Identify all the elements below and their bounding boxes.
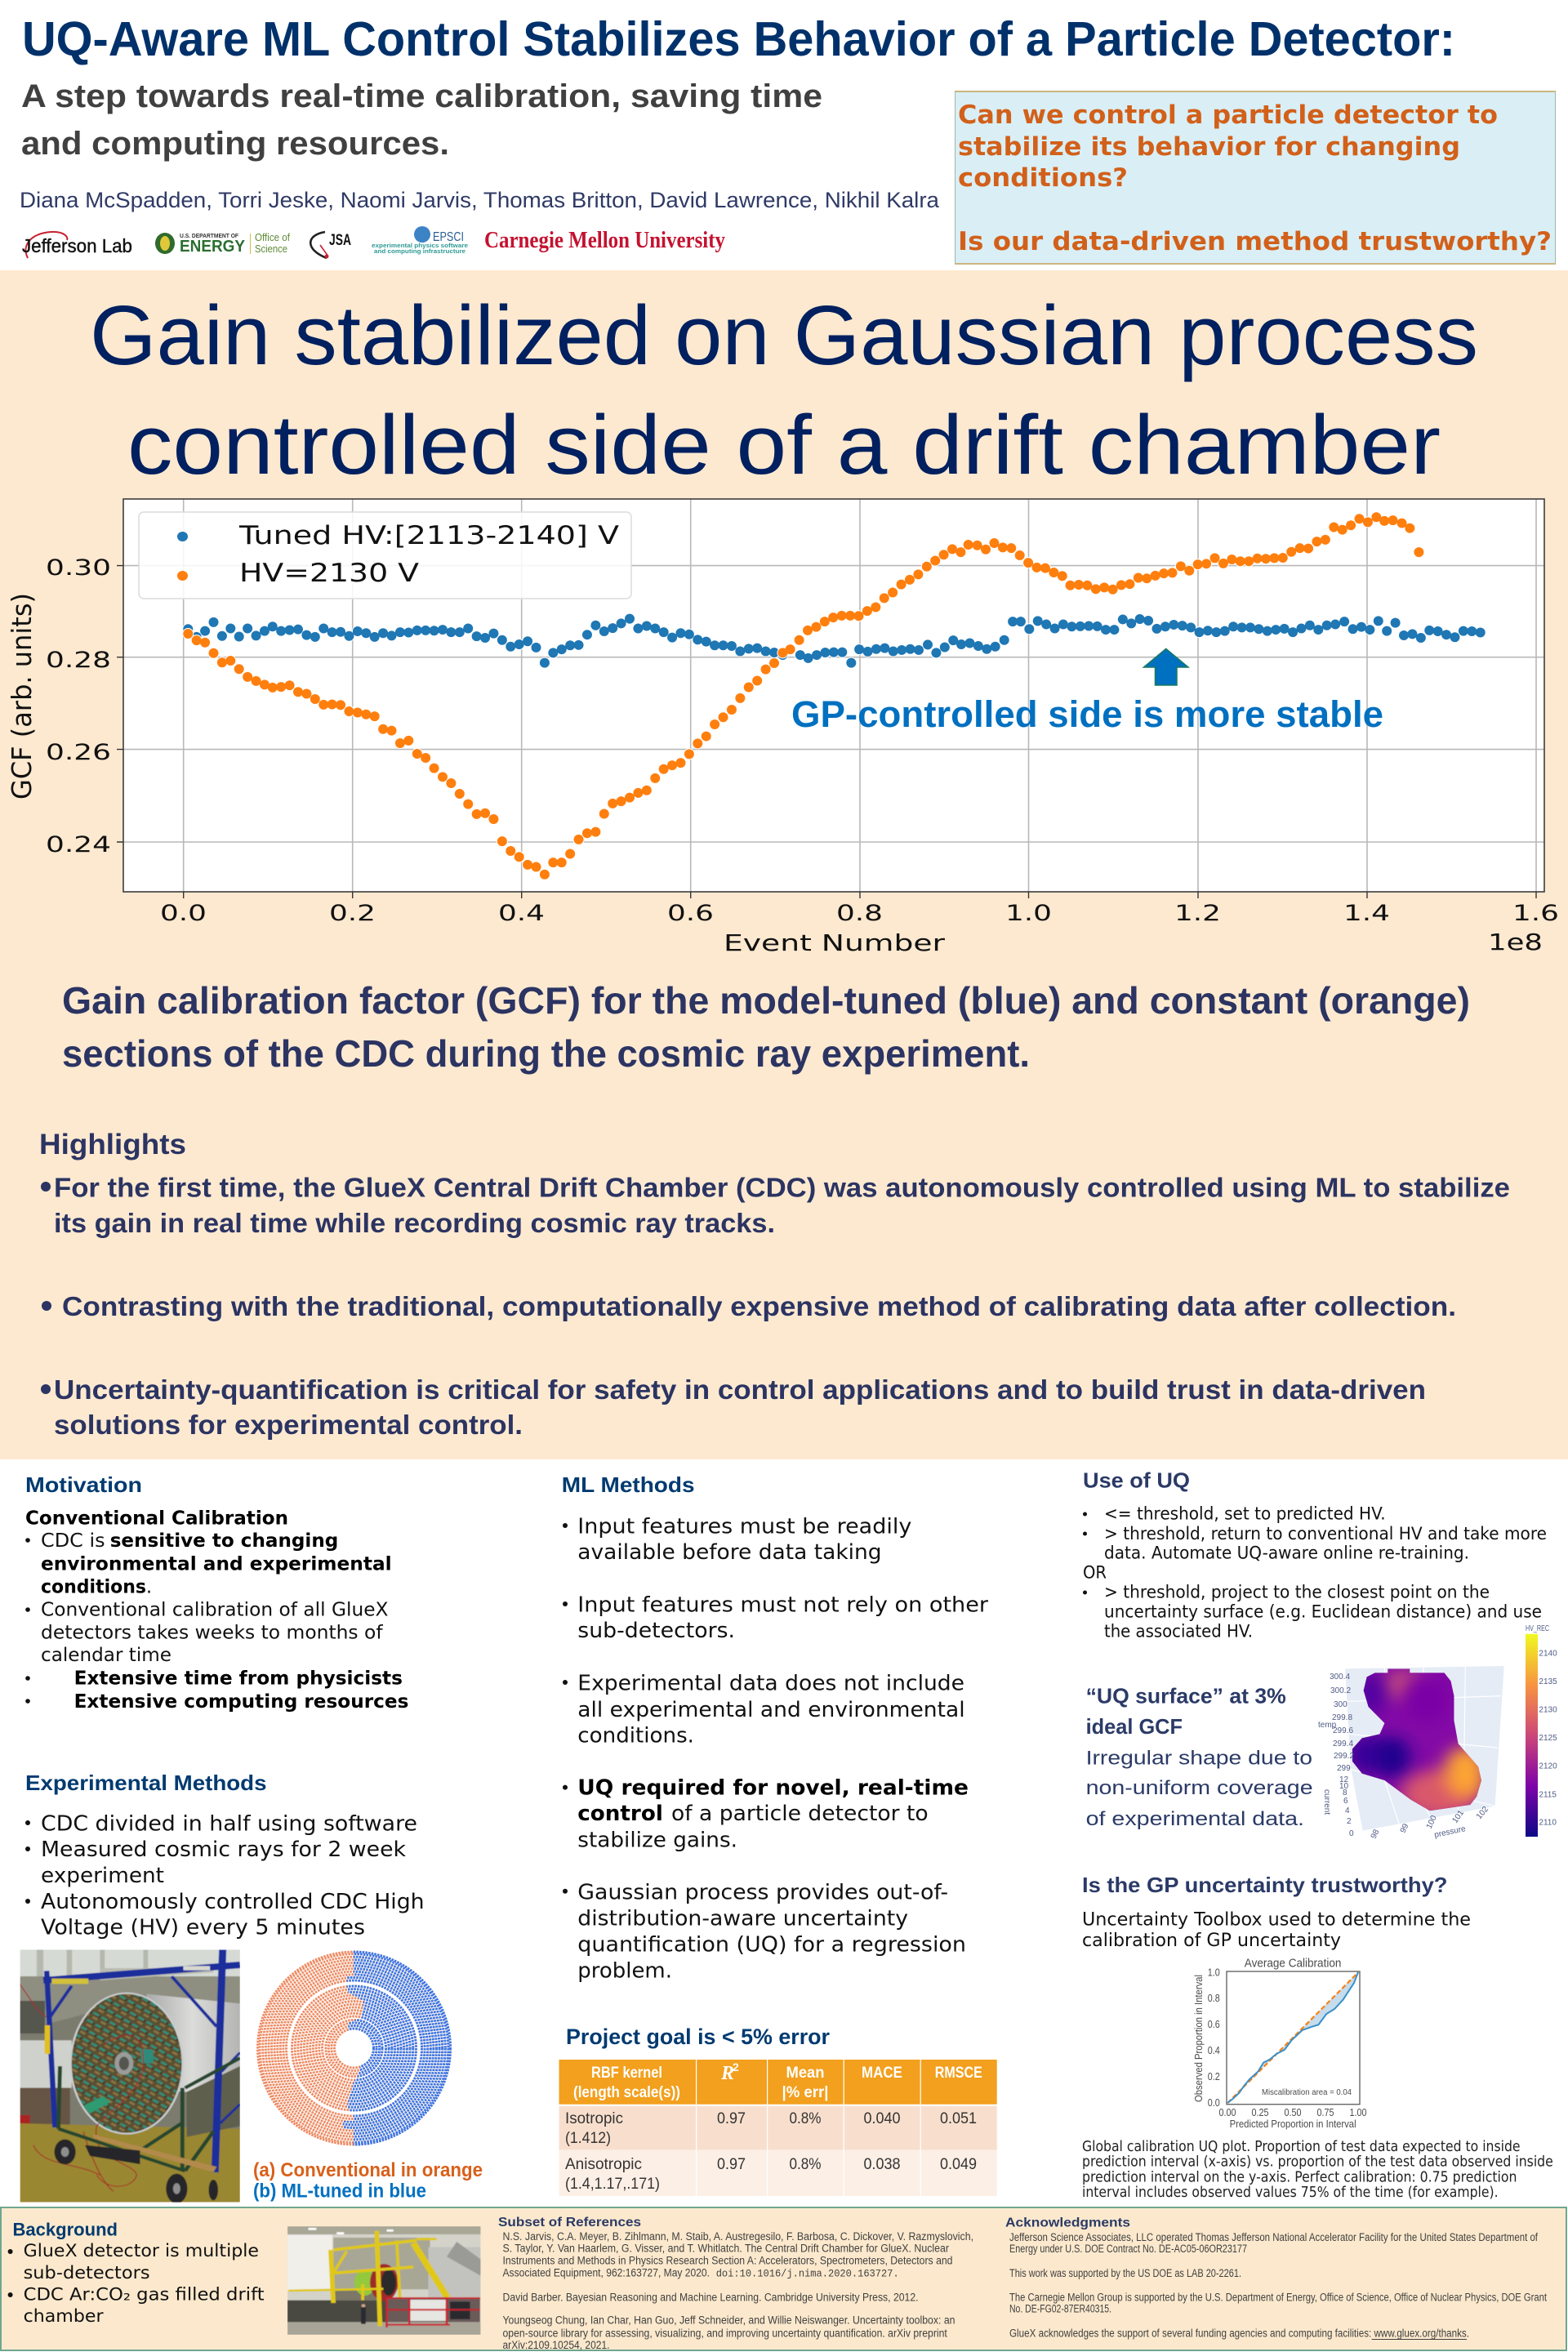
text block: background: CDC Ar:CO₂ gas filled drift [24,2285,265,2305]
text block: background: GlueX detector is multiple [24,2241,259,2261]
x axis tick labels [160,901,1559,926]
panel: ML methods: control [577,1802,663,1826]
table: kernel results: 0.97 [717,2156,746,2173]
legend: Tuned HV:[2113-2140] V [238,521,619,550]
logo: U.S. Department of Energy Office of Science: Office of [255,231,290,243]
highlights: Contrasting with the traditional, computationally expensive method of calibrating data after collection. [62,1292,1456,1322]
table: kernel results: 0.8% [789,2110,822,2127]
panel: use of UQ: <= threshold, set to predicted HV. [1104,1504,1386,1524]
x axis tick labels: 1.4 [1343,901,1390,926]
panel: use of UQ: the associated HV. [1104,1622,1253,1642]
subtitle: and computing resources. [21,126,449,162]
axis labels: 101 [1450,1808,1466,1825]
main headline: Gain stabilized on Gaussian process [90,288,1478,382]
x axis tick labels: 1.6 [1512,901,1559,926]
y axis tick labels: 0.26 [46,740,111,765]
diagram legend: (b) ML-tuned in blue [253,2180,426,2203]
axis labels: pressure [1433,1824,1467,1840]
arrow: pointing to GP-controlled series [1143,648,1188,685]
axis labels: 99 [1399,1822,1411,1834]
highlights: its gain in real time while recording cosmic ray tracks. [54,1209,775,1239]
panel: experimental methods [25,1771,425,1940]
highlights [39,1129,1510,1441]
logo: U.S. Department of Energy Office of Science: ENERGY [180,238,246,256]
panel: experimental methods: Experimental Methods [25,1771,266,1795]
chart: average calibration: 0.50 [1284,2106,1302,2118]
text block: references: N.S. Jarvis, C.A. Meyer, B. Zihlmann, M. Staib, A. Austregesilo, F. Barbosa, C. Dickover, V. Razmyslovich, [503,2230,973,2243]
colorbar: 2120 [1539,1762,1557,1771]
axis labels: 102 [1475,1805,1490,1821]
panel: ML methods: stabilize gains. [577,1828,737,1852]
text block: background: sub-detectors [24,2263,150,2283]
panel: experimental methods: Autonomously controlled CDC High [41,1890,425,1914]
main headline: controlled side of a drift chamber [127,398,1441,492]
x axis tick labels: 0.2 [329,901,376,926]
chart: 3D UQ surface with colorbar [1318,1624,1557,1840]
panel: experimental methods: CDC divided in half using software [41,1812,417,1837]
panel: ML methods [562,1472,988,1983]
text block: acknowledgments: Acknowledgments [1005,2216,1130,2230]
logo: Carnegie Mellon University: Carnegie Mellon University [484,228,725,253]
colorbar [1526,1624,1557,1837]
panel: GP uncertainty trust: Is the GP uncertainty trustworthy? [1082,1873,1447,1897]
panel: use of UQ: OR [1083,1563,1107,1583]
chart: average calibration [1192,1956,1367,2130]
scatter chart: GCF vs event number [6,499,1559,956]
panel: ML methods: ML Methods [562,1472,695,1497]
title: UQ-Aware ML Control Stabilizes Behavior of a Particle Detector: [22,12,1455,66]
logos row [22,226,725,258]
y axis tick labels: 0.24 [46,832,111,858]
panel: ML methods: conditions. [577,1723,694,1748]
panel: GP uncertainty trust: Uncertainty Toolbox used to determine the [1082,1909,1471,1930]
photo: GlueX detector hall [287,2226,481,2335]
logo: U.S. Department of Energy Office of Science [155,231,290,256]
subtitle: A step towards real-time calibration, saving time [21,78,822,114]
y axis tick labels: 0.30 [46,555,111,581]
table: kernel results: 0.049 [940,2156,977,2173]
panel: ML methods: Gaussian process provides out-of- [577,1880,948,1904]
table: kernel results: 2 [733,2060,739,2074]
colorbar: 2130 [1539,1705,1557,1715]
axis labels: 12 [1339,1775,1349,1784]
chart caption: sections of the CDC during the cosmic ray experiment. [62,1032,1030,1075]
panel: use of UQ: data. Automate UQ-aware online re-training. [1104,1544,1469,1563]
axis labels: 299.8 [1332,1713,1352,1722]
text block: background: chamber [24,2306,104,2326]
axis labels: 299 [1337,1764,1351,1773]
text block: background [8,2220,265,2326]
logo: EPSCI: experimental physics software [372,243,468,249]
table: kernel results: RBF kernel [591,2065,662,2082]
heading: project goal: Project goal is < 5% error [566,2025,830,2049]
panel: footer [1,2207,1566,2350]
chart: average calibration: 1.00 [1349,2106,1367,2118]
table: kernel results: 0.97 [717,2110,746,2127]
highlights: solutions for experimental control. [54,1410,523,1441]
panel: motivation: Motivation [25,1472,142,1497]
chart: average calibration: 0.6 [1208,2018,1220,2030]
text block: UQ surface: “UQ surface” at 3% [1086,1684,1286,1708]
diagram legend [253,2159,483,2203]
panel: ML methods: UQ required for novel, real-time [577,1775,969,1800]
panel: main result [0,270,1568,1459]
logo: Jefferson Lab: Jefferson Lab [22,235,132,256]
text block: UQ surface: of experimental data. [1086,1808,1304,1830]
text block: references: Associated Equipment, 962:163727, May 2020. [503,2266,710,2278]
axis labels: 98 [1370,1828,1382,1840]
table: kernel results: (length scale(s)) [573,2084,680,2101]
table: kernel results: (1.4,1.17,.171) [565,2176,660,2193]
logo: EPSCI: EPSCI [433,230,464,244]
logo: EPSCI [372,226,468,255]
panel: use of UQ [1083,1468,1547,1642]
x axis tick labels: 0.6 [667,901,714,926]
text block: references: doi:10.1016/j.nima.2020.163727. [716,2268,899,2279]
panel: experimental methods: Voltage (HV) every 5 minutes [41,1916,365,1940]
axis titles: GCF (arb. units) [6,593,38,800]
panel: experimental methods: Measured cosmic rays for 2 week [41,1838,406,1862]
panel: ML methods: Input features must be readily [577,1514,911,1539]
panel: ML methods: Input features must not rely on other [577,1592,988,1617]
panel: GP uncertainty trust: calibration of GP uncertainty [1082,1931,1341,1951]
axis labels: 299.2 [1334,1752,1354,1761]
photo: central drift chamber on cart [20,1949,240,2203]
axis titles: 1e8 [1488,929,1543,956]
axis labels: 299.4 [1333,1740,1353,1748]
axis titles [6,593,1543,956]
table: kernel results: RMSCE [935,2065,982,2082]
panel: ML methods: Experimental data does not include [577,1671,964,1695]
authors: Diana McSpadden, Torri Jeske, Naomi Jarvis, Thomas Britton, David Lawrence, Nikhil Kalra [20,188,939,212]
x axis tick labels: 1.0 [1005,901,1052,926]
colorbar: 2115 [1539,1790,1557,1800]
panel: ML methods: sub-detectors. [577,1619,735,1643]
logo: JSA: JSA [329,232,351,249]
axis labels: 300.2 [1330,1686,1351,1695]
table: kernel results: Isotropic [565,2110,623,2127]
chart: average calibration: Miscalibration area = 0.04 [1262,2088,1352,2097]
panel: ML methods: available before data taking [577,1540,882,1565]
caption: calibration plot: interval includes observed values 75% of the time (for example). [1082,2184,1499,2201]
chart caption: Gain calibration factor (GCF) for the model-tuned (blue) and constant (orange) [62,979,1470,1022]
chart: average calibration: Observed Proportion in Interval [1192,1975,1205,2102]
logo: JSA [310,232,351,258]
logo: EPSCI: and computing infrastructure [374,249,466,255]
logo: U.S. Department of Energy Office of Science: U.S. DEPARTMENT OF [180,234,239,239]
text block: references: open-source library for assessing, visualizing, and improving uncertainty quantification. arXiv preprint [503,2328,947,2340]
colorbar: 2110 [1539,1818,1557,1828]
diagram: CDC straw layout split orange and blue [258,1952,451,2145]
table: kernel results: 0.051 [940,2110,977,2127]
highlights: Highlights [39,1129,186,1160]
text block: acknowledgments [1005,2216,1547,2340]
colorbar: 2135 [1539,1677,1557,1686]
x axis tick labels: 0.8 [836,901,883,926]
axis labels: 300 [1334,1700,1348,1709]
caption: calibration plot [1082,2138,1553,2201]
table: kernel results: MACE [862,2065,902,2082]
table: kernel results: 0.040 [864,2110,900,2127]
axis labels: 100 [1425,1814,1439,1830]
highlights: Uncertainty-quantification is critical for safety in control applications and to build trust in data-driven [54,1375,1426,1405]
axis labels: 8 [1343,1788,1348,1797]
callout: research questions: conditions? [958,163,1128,193]
chart: average calibration: 0.0 [1208,2096,1220,2109]
text block: references: Instruments and Methods in Physics Research Section A: Accelerators, Spectrometers, Detectors and [503,2254,952,2266]
axis labels: 300.4 [1330,1673,1350,1682]
panel: motivation: Extensive computing resources [74,1690,408,1713]
text block: references: David Barber. Bayesian Reasoning and Machine Learning. Cambridge University Press, 2012. [503,2291,918,2303]
panel: motivation: sensitive to changing [110,1529,338,1552]
chart caption [62,979,1470,1075]
axis labels: 299.6 [1333,1726,1353,1735]
colorbar: 2140 [1539,1650,1557,1658]
axis labels: 10 [1339,1782,1349,1791]
chart: average calibration: 1.0 [1208,1966,1220,1978]
text block: references: S. Taylor, Y. Van Haarlem, G. Visser, and T. Whitlatch. The Central Drift Chamber for GlueX. Nuclear [503,2243,949,2255]
panel: motivation: CDC is [41,1529,105,1552]
table: kernel results: Mean [786,2065,825,2082]
panel: motivation: environmental and experimental [41,1552,392,1575]
panel: ML methods: distribution-aware uncertainty [577,1906,908,1931]
annotation: GP-controlled side is more stable [791,693,1383,735]
panel: use of UQ: Use of UQ [1083,1468,1190,1493]
axis labels: 4 [1345,1806,1350,1815]
text block: acknowledgments: Energy under U.S. DOE Contract No. DE-AC05-06OR23177 [1009,2243,1247,2255]
text block: references: arXiv:2109.10254, 2021. [503,2339,609,2351]
text block: UQ surface: ideal GCF [1086,1714,1183,1739]
logo: U.S. Department of Energy Office of Science: Science [255,243,287,255]
chart: average calibration: 0.4 [1208,2044,1220,2056]
panel: experimental methods: experiment [41,1864,164,1888]
table: kernel results: (1.412) [565,2130,611,2147]
text block: background: Background [13,2220,118,2240]
legend [139,512,631,599]
callout: research questions: Is our data-driven method trustworthy? [958,227,1552,256]
table: kernel results: R [720,2063,734,2084]
panel: ML methods: all experimental and environmental [577,1698,965,1722]
axis titles: Event Number [724,929,946,956]
panel: use of UQ: uncertainty surface (e.g. Euclidean distance) and use [1104,1602,1542,1622]
panel: motivation [25,1472,408,1713]
text block: references [498,2216,973,2351]
highlights: For the first time, the GlueX Central Drift Chamber (CDC) was autonomously controlled using ML to stabilize [54,1173,1510,1204]
subtitle [21,78,822,162]
text block: UQ surface: non-uniform coverage [1086,1777,1313,1799]
chart: average calibration: Average Calibration [1245,1956,1341,1970]
plot panes [1345,1664,1504,1831]
table: kernel results: 0.8% [789,2156,822,2173]
text block: UQ surface [1086,1684,1313,1830]
chart: average calibration: 0.8 [1208,1992,1220,2004]
table: kernel results: Anisotropic [565,2156,642,2173]
data series: tuned HV and constant HV [188,517,1481,875]
panel: motivation: Conventional Calibration [25,1506,288,1529]
panel: ML methods: problem. [577,1958,672,1983]
text block: acknowledgments: GlueX acknowledges the support of several funding agencies and computing facilities: www.gluex.org/thanks. [1009,2328,1469,2340]
axis labels: current [1322,1789,1331,1815]
panel: ML methods: of a particle detector to [671,1802,929,1826]
text block: acknowledgments: No. DE-FG02-87ER40315. [1009,2303,1111,2315]
panel: GP uncertainty trust [1082,1873,1471,1951]
panel: use of UQ: > threshold, return to conventional HV and take more [1104,1524,1547,1544]
chart: average calibration: 0.25 [1251,2106,1269,2118]
panel: motivation: conditions. [41,1575,152,1598]
axis labels [1318,1673,1490,1840]
x axis tick labels: 0.0 [160,901,207,926]
y axis tick labels: 0.28 [46,648,111,673]
callout: research questions [955,91,1556,265]
panel: motivation: detectors takes weeks to months of [41,1621,383,1644]
chart: average calibration: 0.2 [1208,2070,1220,2082]
axis labels: 0 [1349,1829,1354,1838]
panel: ML methods: quantification (UQ) for a regression [577,1932,966,1957]
callout: research questions: Can we control a particle detector to [958,100,1498,130]
colorbar: 2125 [1539,1734,1557,1743]
panel: use of UQ: > threshold, project to the closest point on the [1104,1583,1490,1602]
y axis tick labels [46,555,111,858]
main headline [90,288,1478,492]
panel: motivation: Extensive time from physicists [74,1666,403,1689]
x axis tick labels: 0.4 [498,901,545,926]
table: kernel results: 0.038 [864,2156,900,2173]
chart: average calibration: 0.00 [1218,2106,1236,2118]
x axis tick labels: 1.2 [1174,901,1221,926]
diagram legend: (a) Conventional in orange [253,2159,483,2181]
table: kernel results: |% err| [782,2084,828,2101]
text block: UQ surface: Irregular shape due to [1086,1748,1312,1770]
colorbar: HV_REC [1526,1624,1549,1633]
axis labels: temp [1318,1721,1337,1730]
legend: HV=2130 V [239,559,419,588]
callout: research questions: stabilize its behavior for changing [958,132,1460,162]
text block: references: Youngseog Chung, Ian Char, Han Guo, Jeff Schneider, and Willie Neiswanger. Uncertainty toolbox: an [503,2314,956,2327]
chart: average calibration: Predicted Proportion in Interval [1230,2118,1356,2130]
axis labels: 2 [1347,1817,1352,1826]
chart: average calibration: 0.75 [1316,2106,1334,2118]
caption: calibration plot: prediction interval on the y-axis. Perfect calibration: 0.75 prediction [1082,2169,1517,2186]
axis labels: 6 [1343,1797,1348,1806]
text block: references: Subset of References [498,2216,641,2230]
panel: motivation: calendar time [41,1643,172,1666]
text block: acknowledgments: This work was supported by the US DOE as LAB 20-2261. [1009,2267,1241,2279]
table: kernel results [559,2060,997,2196]
panel: motivation: Conventional calibration of all GlueX [41,1597,389,1620]
